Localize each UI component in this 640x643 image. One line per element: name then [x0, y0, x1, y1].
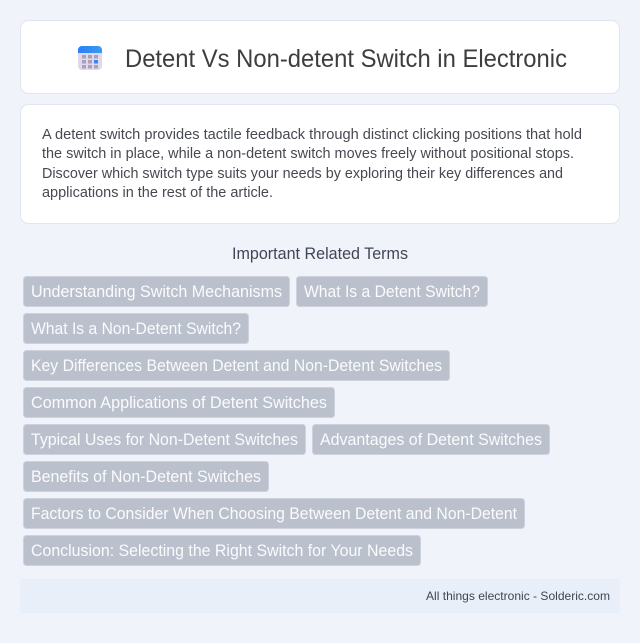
tag: factors [24, 498, 524, 528]
tag: understanding switch mechanisms: Understanding Switch Mechanisms [31, 283, 282, 301]
text block: description [42, 126, 582, 201]
text block: description: A detent switch provides tactile feedback through distinct clicking positions that hold [42, 126, 582, 143]
tag: what is a detent switch: What Is a Detent Switch? [304, 283, 480, 301]
text block: description: applications in the rest of the article. [42, 184, 273, 201]
tag: common applications [24, 388, 334, 418]
tag: key differences: Key Differences Between Detent and Non-Detent Switches [31, 357, 442, 375]
tag: benefits: Benefits of Non-Detent Switches [31, 468, 261, 486]
tag: benefits [24, 462, 268, 492]
tag: advantages: Advantages of Detent Switches [320, 431, 542, 449]
tag: typical uses: Typical Uses for Non-Detent Switches [31, 431, 298, 449]
tag: what is a non-detent switch: What Is a Non-Detent Switch? [31, 320, 241, 338]
tag: understanding switch mechanisms [24, 276, 290, 306]
tag: conclusion: Conclusion: Selecting the Right Switch for Your Needs [31, 542, 413, 560]
text block: description: Discover which switch type suits your needs by exploring their key differences and [42, 165, 563, 182]
footer: All things electronic - Solderic.com [426, 589, 610, 603]
tag: advantages [312, 424, 550, 454]
tag: typical uses [24, 424, 306, 454]
heading: related terms: Important Related Terms [232, 245, 408, 263]
tag: what is a detent switch [296, 276, 488, 306]
icon: calendar [78, 46, 102, 70]
text block: description: the switch in place, while a non-detent switch moves freely without positional stops. [42, 145, 574, 162]
tag: conclusion [24, 536, 420, 566]
footer [20, 579, 620, 613]
panel: description [20, 104, 620, 224]
title: Detent Vs Non-detent Switch in Electronic [125, 45, 567, 73]
tag: factors: Factors to Consider When Choosing Between Detent and Non-Detent [31, 505, 517, 523]
tag: common applications: Common Applications of Detent Switches [31, 394, 327, 412]
tag list [24, 276, 550, 566]
panel: header [20, 20, 620, 94]
tag: key differences [24, 350, 450, 380]
tag: what is a non-detent switch [24, 314, 248, 344]
